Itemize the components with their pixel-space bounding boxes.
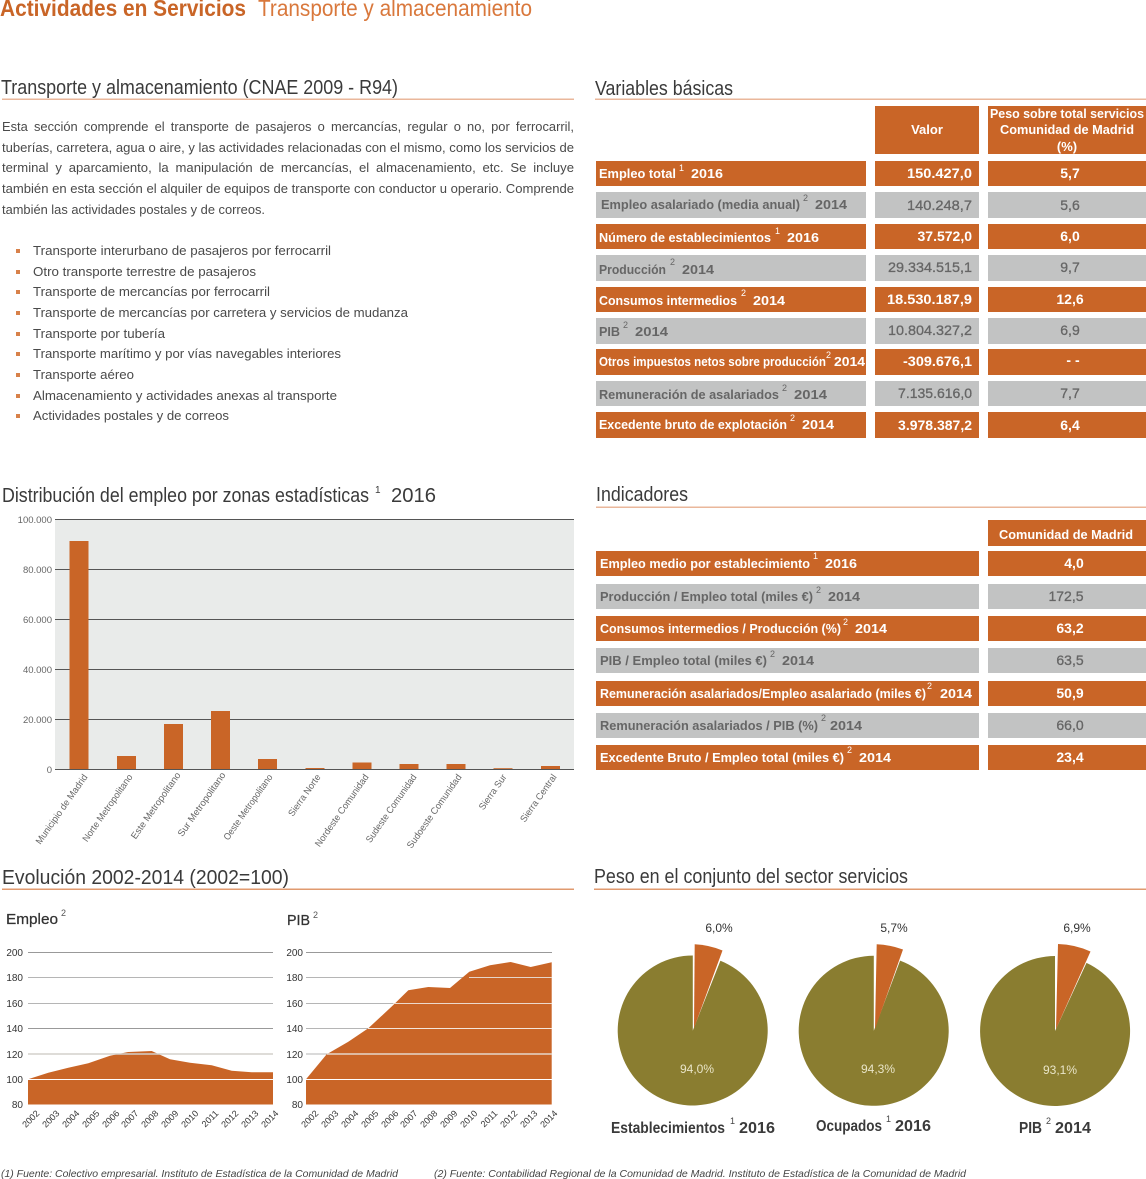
panel: distribución del empleo	[2, 485, 574, 851]
area chart: PIB: PIB	[287, 912, 310, 929]
table header: valor: Valor	[911, 122, 943, 137]
row: otros impuestos: - -	[1066, 352, 1080, 368]
bar chart: empleo por zona: Sur Metropolitano	[176, 770, 228, 839]
row: excedente / empleo	[596, 745, 1146, 770]
table header: valor	[875, 106, 979, 154]
row: empleo total: 150.427,0	[907, 165, 972, 181]
row: número de establecimientos: Número de establecimientos	[599, 230, 771, 245]
bar chart: empleo por zona: Sudeste Comunidad	[364, 772, 419, 845]
area chart: empleo: 2002	[20, 1108, 41, 1130]
text block: description paragraph	[2, 120, 574, 217]
row: empleo total: 5,7	[1060, 165, 1080, 181]
area chart: empleo: 2010	[179, 1108, 200, 1130]
table header: peso: (%)	[1057, 139, 1077, 154]
row: otros impuestos: Otros impuestos netos sobre producción	[599, 354, 826, 369]
row: producción / empleo: 172,5	[1048, 588, 1084, 604]
area chart: PIB: 200	[286, 948, 303, 959]
row: consumos intermedios: 12,6	[1056, 291, 1084, 307]
area chart: empleo: 2003	[40, 1108, 61, 1130]
area chart: PIB: 2007	[398, 1108, 419, 1130]
bar chart: empleo por zona: 60.000	[23, 615, 52, 626]
area chart: empleo: 2012	[219, 1108, 240, 1130]
pie chart: PIB: 2	[1046, 1116, 1051, 1126]
row: consumos intermedios	[596, 287, 1146, 312]
bar chart: empleo por zona	[18, 515, 574, 851]
row: remuneración / empleo asalariado: 2014	[940, 686, 973, 701]
row: remuneración / empleo asalariado: 50,9	[1056, 685, 1084, 701]
panel: evolución	[2, 867, 574, 1130]
row: producción: 29.334.515,1	[888, 259, 972, 275]
row: excedente bruto: 3.978.387,2	[898, 417, 972, 433]
text block: description paragraph: terminal y aparcamiento, la manipulación de mercancías, el almacenamiento, etc. Se incluye	[2, 161, 574, 175]
bar chart: empleo por zona: 40.000	[23, 665, 52, 676]
area chart: empleo: 2	[61, 908, 66, 918]
heading: indicadores: Indicadores	[596, 484, 688, 506]
area chart: PIB: 2008	[418, 1108, 439, 1130]
area chart: empleo: 200	[6, 948, 23, 959]
row: PIB: PIB	[599, 324, 620, 339]
row: consumos intermedios: 2	[741, 288, 746, 298]
pie chart: establecimientos: 6,0%	[705, 921, 733, 935]
row: remuneración / PIB: 66,0	[1056, 717, 1084, 733]
row: PIB	[596, 318, 1146, 344]
pie chart: ocupados: 5,7%	[880, 921, 908, 935]
row: remuneración / empleo asalariado	[596, 681, 1146, 706]
area chart: empleo: 120	[6, 1050, 23, 1061]
row: empleo asalariado: 2	[803, 193, 808, 203]
area chart: PIB	[286, 910, 559, 1130]
row: producción: 2	[670, 257, 675, 267]
pie chart: establecimientos: 2016	[739, 1120, 775, 1137]
row: remuneración / PIB: Remuneración asalariados / PIB (%)	[600, 718, 818, 733]
panel: peso en servicios	[594, 866, 1146, 1137]
row: remuneración / PIB: 2	[821, 713, 826, 723]
row: excedente / empleo: 2014	[859, 750, 892, 765]
bar chart: empleo por zona: Sierra Sur	[477, 772, 509, 812]
row: remuneración / empleo asalariado: Remuneración asalariados/Empleo asalariado (miles €)	[600, 686, 926, 701]
pie chart: ocupados: 1	[886, 1114, 891, 1124]
panel: description	[1, 77, 574, 423]
area chart: PIB: 2	[313, 910, 318, 920]
list: transport activities: Transporte por tubería	[33, 327, 165, 341]
area chart: empleo: 2011	[200, 1108, 220, 1129]
area chart: PIB: 160	[286, 999, 303, 1010]
list: transport activities: Transporte de mercancías por ferrocarril	[33, 285, 270, 299]
row: PIB / empleo: PIB / Empleo total (miles €)	[600, 653, 767, 668]
row: excedente / empleo: 2	[847, 745, 852, 755]
row: empleo asalariado	[596, 192, 1146, 218]
heading: distribución: Distribución del empleo por zonas estadísticas	[2, 485, 369, 507]
list: transport activities: Otro transporte terrestre de pasajeros	[33, 265, 256, 279]
row: empleo total: Empleo total	[599, 166, 676, 181]
pie chart: ocupados: 2016	[895, 1118, 931, 1135]
row: otros impuestos	[596, 349, 1146, 375]
panel: variables básicas	[595, 78, 1146, 438]
bar chart: empleo por zona: Nordeste Comunidad	[313, 772, 371, 849]
row: PIB / empleo: 2	[770, 649, 775, 659]
footnotes	[1, 1168, 967, 1179]
row: empleo asalariado: 140.248,7	[907, 197, 972, 213]
row: remuneración de asalariados: 7.135.616,0	[898, 385, 972, 401]
list: transport activities: Almacenamiento y actividades anexas al transporte	[33, 389, 337, 403]
bar chart: empleo por zona: Oeste Metropolitano	[222, 772, 275, 843]
pie chart: PIB: 93,1%	[1043, 1063, 1077, 1077]
area chart: PIB: 180	[286, 973, 303, 984]
row: remuneración de asalariados: 2	[782, 383, 787, 393]
row: PIB / empleo	[596, 648, 1146, 673]
row: empleo asalariado: Empleo asalariado (media anual)	[601, 197, 800, 212]
row: remuneración de asalariados	[596, 381, 1146, 406]
row: PIB / empleo: 2014	[782, 653, 815, 668]
row: PIB: 10.804.327,2	[888, 322, 972, 338]
area chart: empleo: 80	[12, 1100, 23, 1111]
row: empleo medio: 2016	[825, 556, 857, 571]
area chart: empleo: 2009	[159, 1108, 180, 1130]
area chart: PIB: 2003	[319, 1108, 340, 1130]
bar chart: empleo por zona: Norte Metropolitano	[81, 772, 135, 844]
list: transport activities: Actividades postales y de correos	[33, 409, 229, 423]
row: producción	[596, 255, 1146, 281]
bar chart: empleo por zona: Sierra Central	[518, 772, 559, 825]
panel: indicadores	[596, 484, 1146, 770]
row: remuneración de asalariados: 2014	[794, 387, 828, 402]
area chart: empleo: 180	[6, 973, 23, 984]
title	[0, 0, 532, 21]
row: producción / empleo: 2014	[828, 589, 861, 604]
row: consumos / producción: 2014	[855, 621, 888, 636]
area chart: PIB: 2011	[479, 1108, 499, 1129]
pie chart: ocupados: 94,3%	[861, 1062, 895, 1076]
table header: peso: Comunidad de Madrid	[1000, 122, 1134, 137]
area chart: empleo: 2005	[80, 1108, 101, 1130]
pie chart: PIB	[980, 921, 1130, 1137]
row: empleo total: 2016	[691, 166, 723, 181]
row: PIB: 2	[623, 320, 628, 330]
bar chart: empleo por zona: 80.000	[23, 565, 52, 576]
row: número de establecimientos: 6,0	[1060, 228, 1080, 244]
pie chart: PIB: PIB	[1019, 1120, 1042, 1137]
text block: description paragraph: tuberías, carretera, agua o aire, y las actividades relacionadas con el mismo, como los servicios de	[2, 141, 574, 155]
row: excedente bruto: Excedente bruto de explotación	[599, 417, 787, 432]
area chart: PIB: 100	[286, 1075, 303, 1086]
row: excedente bruto: 6,4	[1060, 417, 1080, 433]
heading: peso: Peso en el conjunto del sector servicios	[594, 866, 908, 888]
row: otros impuestos: -309.676,1	[903, 353, 972, 369]
row: número de establecimientos	[596, 224, 1146, 249]
row: excedente bruto: 2014	[802, 417, 835, 432]
area chart: empleo: 2004	[60, 1108, 81, 1130]
pie chart: establecimientos: 94,0%	[680, 1062, 714, 1076]
heading: variables básicas: Variables básicas	[595, 78, 733, 100]
pie chart: establecimientos: Establecimientos	[611, 1120, 725, 1137]
bar chart: empleo por zona: 20.000	[23, 715, 52, 726]
area chart: empleo: 2014	[259, 1108, 280, 1130]
row: número de establecimientos: 37.572,0	[918, 228, 972, 244]
area chart: empleo: 2013	[239, 1108, 260, 1130]
row: consumos intermedios: 2014	[753, 293, 786, 308]
area chart: PIB: 2013	[518, 1108, 539, 1130]
list: transport activities: Transporte de mercancías por carretera y servicios de mudanza	[33, 306, 408, 320]
area chart: PIB: 80	[292, 1100, 303, 1111]
row: PIB: 6,9	[1060, 322, 1080, 338]
area chart: PIB: 2004	[339, 1108, 360, 1130]
bar chart: empleo por zona: Sudoeste Comunidad	[405, 772, 464, 851]
pie chart: PIB: 2014	[1055, 1120, 1091, 1137]
bar chart: empleo por zona: 0	[47, 765, 52, 776]
pie chart: ocupados: Ocupados	[816, 1118, 882, 1135]
row: excedente / empleo: 23,4	[1056, 749, 1084, 765]
row: otros impuestos: 2014	[834, 354, 866, 369]
row: empleo medio	[596, 551, 1146, 576]
area chart: empleo: 2008	[139, 1108, 160, 1130]
table header: peso	[988, 106, 1146, 154]
heading: distribución: 1	[375, 485, 381, 496]
area chart: PIB: 140	[286, 1024, 303, 1035]
row: remuneración de asalariados: Remuneración de asalariados	[599, 387, 779, 402]
area chart: empleo	[6, 908, 280, 1130]
row: empleo medio: Empleo medio por establecimiento	[600, 556, 810, 571]
bar chart: empleo por zona: Municipio de Madrid	[34, 772, 90, 847]
row: número de establecimientos: 1	[775, 226, 780, 236]
area chart: empleo: Empleo	[6, 911, 58, 928]
row: producción / empleo	[596, 584, 1146, 609]
row: remuneración / PIB	[596, 713, 1146, 738]
bar chart: empleo por zona: Este Metropolitano	[129, 770, 183, 841]
area chart: empleo: 100	[6, 1075, 23, 1086]
list: transport activities: Transporte interurbano de pasajeros por ferrocarril	[33, 244, 331, 258]
row: consumos / producción: 63,2	[1056, 620, 1084, 636]
pie chart: PIB: 6,9%	[1063, 921, 1091, 935]
row: remuneración / PIB: 2014	[830, 718, 863, 733]
area chart: PIB: 2002	[299, 1108, 320, 1130]
row: empleo total: 1	[679, 163, 684, 173]
row: empleo asalariado: 2014	[815, 197, 848, 212]
row: empleo medio: 1	[813, 551, 818, 561]
row: empleo asalariado: 5,6	[1060, 197, 1080, 213]
row: otros impuestos: 2	[826, 350, 831, 360]
row: empleo total	[596, 161, 1146, 186]
row: producción: 2014	[682, 262, 715, 277]
text block: description paragraph: también en esta sección el alquiler de equipos de transporte con conductor u operario. Comprende	[2, 182, 574, 196]
row: remuneración de asalariados: 7,7	[1060, 385, 1080, 401]
text block: description paragraph: Esta sección comprende el transporte de pasajeros o mercancías, regular o no, por ferrocarril,	[2, 120, 574, 134]
row: PIB / empleo: 63,5	[1056, 652, 1084, 668]
heading: distribución: 2016	[391, 485, 436, 507]
area chart: PIB: 2009	[438, 1108, 459, 1130]
area chart: PIB: 2012	[498, 1108, 519, 1130]
row: excedente bruto: 2	[790, 413, 795, 423]
row: empleo medio: 4,0	[1064, 555, 1084, 571]
list: transport activities	[16, 244, 408, 423]
pie chart: establecimientos: 1	[730, 1116, 735, 1126]
row: consumos intermedios: 18.530.187,9	[887, 291, 972, 307]
area chart: PIB: 2014	[538, 1108, 559, 1130]
row: producción: 9,7	[1060, 259, 1080, 275]
pie chart: establecimientos	[611, 921, 775, 1137]
area chart: PIB: 2005	[359, 1108, 380, 1130]
row: consumos / producción: Consumos intermedios / Producción (%)	[600, 621, 841, 636]
table header: comunidad de madrid: Comunidad de Madrid	[999, 527, 1133, 542]
row: excedente / empleo: Excedente Bruto / Empleo total (miles €)	[600, 750, 844, 765]
row: remuneración / empleo asalariado: 2	[927, 681, 932, 691]
area chart: empleo: 160	[6, 999, 23, 1010]
heading: evolución: Evolución 2002-2014 (2002=100)	[2, 867, 289, 889]
heading: description: Transporte y almacenamiento (CNAE 2009 - R94)	[1, 77, 398, 99]
row: excedente bruto	[596, 412, 1146, 438]
row: producción: Producción	[599, 262, 666, 277]
row: producción / empleo: 2	[816, 585, 821, 595]
list: transport activities: Transporte aéreo	[33, 368, 134, 382]
row: consumos / producción	[596, 616, 1146, 641]
bar chart: empleo por zona: 100.000	[18, 515, 52, 526]
area chart: empleo: 2006	[100, 1108, 121, 1130]
area chart: empleo: 140	[6, 1024, 23, 1035]
area chart: empleo: 2007	[119, 1108, 140, 1130]
pie chart: ocupados	[799, 921, 949, 1135]
area chart: PIB: 120	[286, 1050, 303, 1061]
text block: description paragraph: también las actividades postales y de correos.	[2, 203, 265, 217]
bar chart: empleo por zona: Sierra Norte	[286, 772, 323, 819]
row: consumos / producción: 2	[843, 617, 848, 627]
row: número de establecimientos: 2016	[787, 230, 819, 245]
row: PIB: 2014	[635, 324, 669, 339]
table header: comunidad de madrid	[988, 520, 1146, 546]
area chart: PIB: 2006	[379, 1108, 400, 1130]
row: consumos intermedios: Consumos intermedios	[599, 293, 737, 308]
list: transport activities: Transporte marítimo y por vías navegables interiores	[33, 347, 341, 361]
row: producción / empleo: Producción / Empleo total (miles €)	[600, 589, 813, 604]
area chart: PIB: 2010	[458, 1108, 479, 1130]
